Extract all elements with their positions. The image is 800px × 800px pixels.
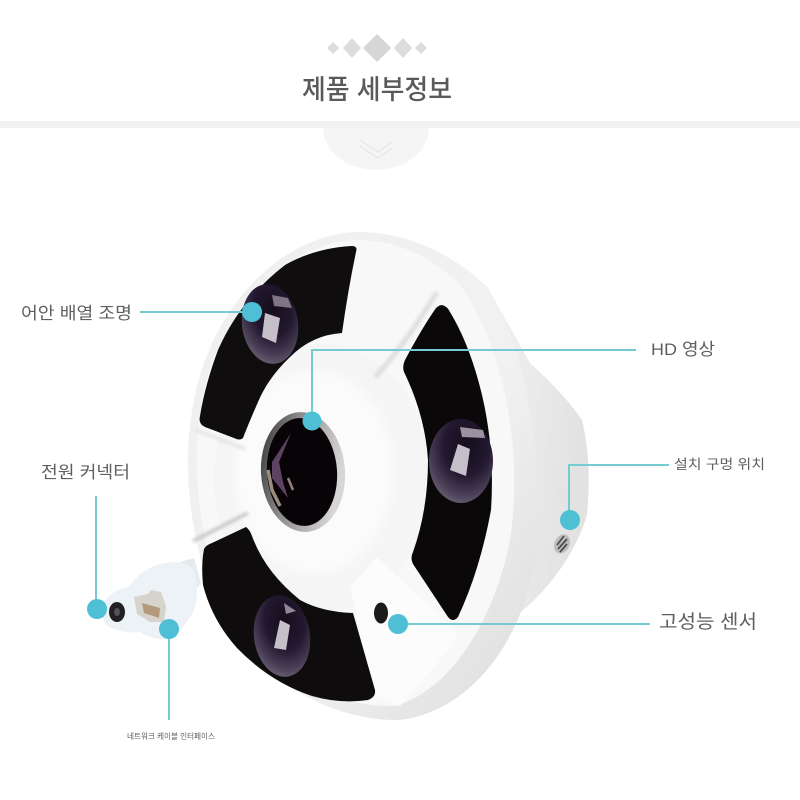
LED right (429, 419, 493, 503)
camera base cone (400, 288, 589, 660)
camera front disk (188, 232, 538, 720)
callout: power connector: 전원 커넥터 (41, 463, 130, 482)
callout: fisheye array lighting: 어안 배열 조명 (21, 304, 132, 323)
callout: mounting hole position (560, 457, 765, 530)
bottom-left black panel (202, 527, 375, 701)
center ring shading (214, 344, 430, 612)
panel seam lower left (193, 513, 248, 541)
callout: network cable interface: 네트워크 케이블 인터페이스 (127, 731, 215, 741)
faceplate highlight (197, 240, 514, 706)
header: diamond ornament (327, 34, 427, 62)
panel seam left (196, 430, 245, 449)
mounting screw hole (551, 532, 573, 556)
callout: HD image: HD 영상 (651, 340, 715, 359)
top-left black panel (200, 246, 356, 440)
camera illustration (188, 232, 589, 720)
callout: network cable interface (127, 619, 215, 741)
callout: mounting hole position: 설치 구멍 위치 (674, 457, 765, 472)
sensor block (350, 557, 457, 706)
title: 제품 세부정보 (302, 75, 452, 105)
LED top-left (237, 280, 303, 368)
LED bottom (249, 592, 315, 680)
callout: power connector (41, 463, 130, 619)
light sensor hole (374, 602, 388, 624)
right black panel (403, 305, 492, 620)
cable connector (102, 558, 201, 639)
main lens (257, 409, 349, 535)
panel seam upper right (375, 292, 437, 377)
callout: high performance sensor (388, 611, 757, 634)
callout: fisheye array lighting (21, 302, 262, 323)
callout: HD image (302, 340, 715, 430)
header divider with chevron tab (0, 121, 800, 170)
callout: high performance sensor: 고성능 센서 (659, 611, 757, 633)
